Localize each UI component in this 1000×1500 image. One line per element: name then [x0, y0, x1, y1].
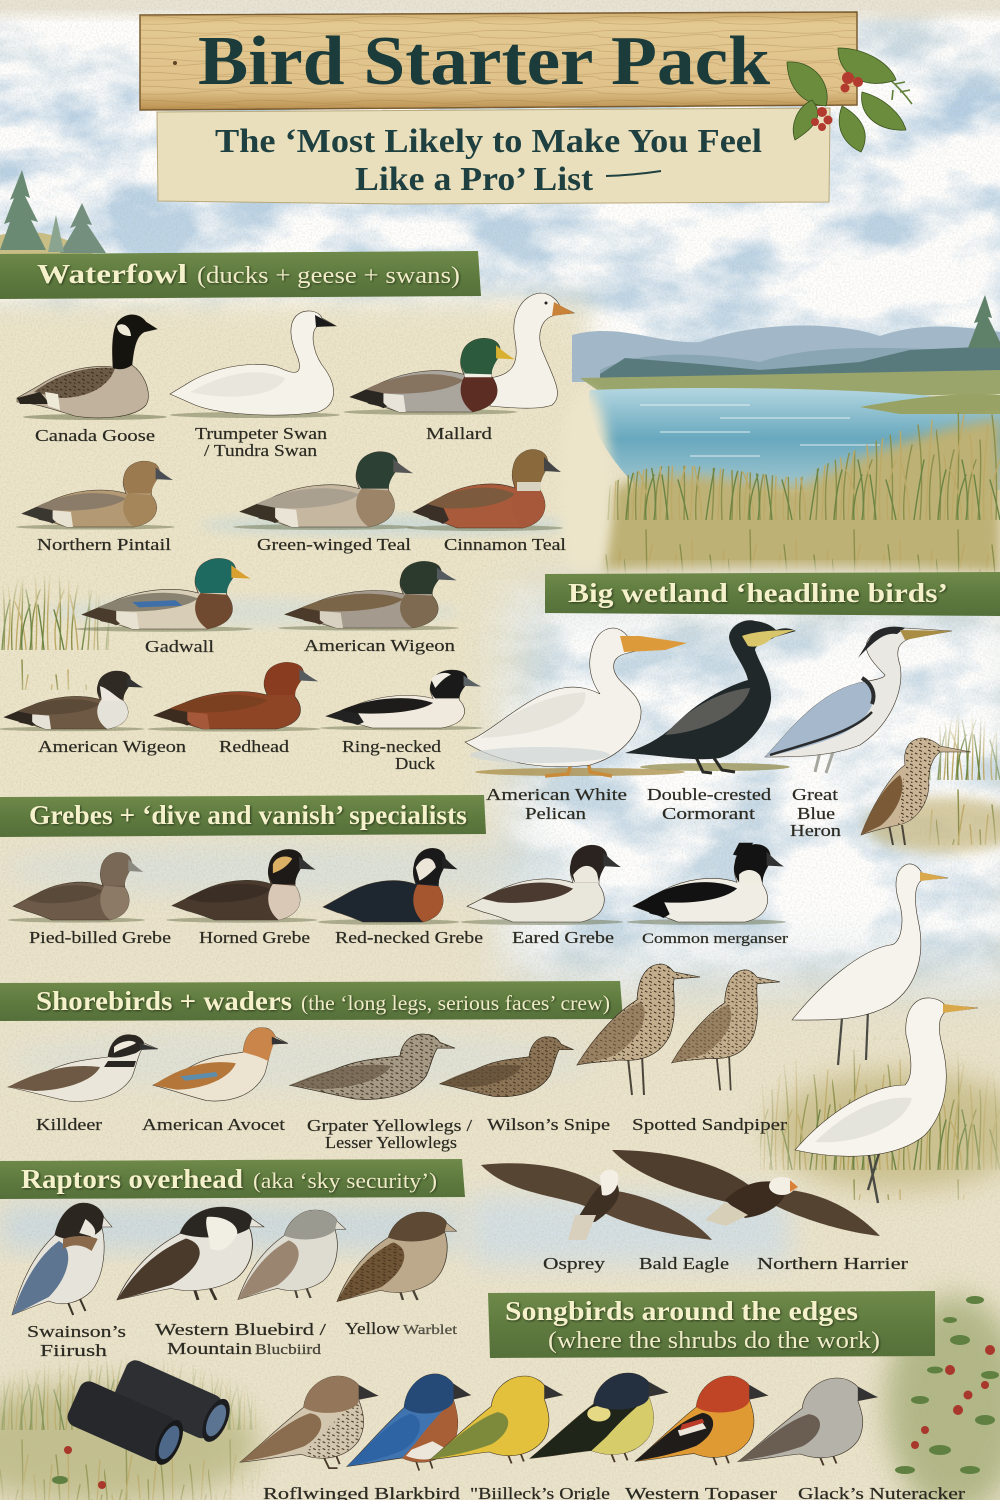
scene: left marsh grass	[0, 570, 110, 690]
labels: grebes: Pied-billed Grebe	[29, 928, 171, 947]
labels: perching birds: Fiirush	[40, 1341, 108, 1360]
banner: raptors: (aka ‘sky security’)	[253, 1168, 437, 1193]
labels: shorebirds: Lesser Yellowlegs	[325, 1133, 457, 1152]
labels: waterfowl species: American Wigeon	[304, 636, 456, 655]
banner: raptors	[0, 1159, 465, 1199]
bird: Canada Goose	[17, 315, 167, 420]
title: Bird Starter Pack	[198, 23, 770, 100]
labels: waterfowl species: American Wigeon	[38, 737, 187, 756]
banner: songbirds: Songbirds around the edges	[505, 1296, 858, 1326]
labels: big wetland species: Pelican	[525, 804, 587, 823]
banner: grebes	[0, 795, 486, 837]
bird: Cinnamon Teal	[407, 450, 563, 531]
bird: Western Bluebird	[117, 1207, 264, 1300]
bird: Green-winged Teal	[233, 452, 416, 530]
scene: shrub at bottom right	[885, 1295, 1000, 1500]
subtitle: Like a Pro’ List	[355, 161, 594, 198]
bird: Trumpeter Swan	[170, 311, 340, 418]
wooden title plank	[140, 12, 857, 110]
scene: distant lake and mountains	[520, 325, 1000, 594]
bird: American Wigeon	[278, 561, 459, 631]
labels: perching birds: Warblet	[403, 1323, 457, 1338]
bird: Swainson's Thrush	[12, 1203, 112, 1315]
labels: waterfowl species	[35, 424, 566, 773]
bird: Western Tanager	[530, 1373, 668, 1462]
bird: American Wigeon second	[0, 671, 145, 731]
bird: Wilson's Snipe	[440, 1037, 574, 1097]
bird: Snowy Egret	[795, 998, 978, 1203]
banner: grebes: Grebes + ‘dive and vanish’ specialists	[29, 800, 467, 830]
bird: American White Pelican	[465, 628, 687, 776]
labels: perching birds: Mountain	[167, 1339, 253, 1358]
labels: big wetland species	[486, 785, 842, 840]
labels: grebes	[29, 928, 788, 947]
icon: binoculars	[64, 1357, 235, 1469]
bird: Pied-billed Grebe	[8, 853, 145, 923]
scene: bottom left grass	[0, 1350, 260, 1500]
scene: right marsh grass by sandpiper	[865, 710, 1000, 853]
labels: big wetland species: Heron	[790, 821, 842, 840]
labels: waterfowl species: Redhead	[219, 737, 290, 756]
labels: raptors: Bald Eagle	[639, 1254, 729, 1273]
banner: waterfowl: (ducks + geese + swans)	[197, 263, 460, 289]
labels: waterfowl species: Green-winged Teal	[257, 535, 411, 554]
bird: Red-winged Blackbird	[240, 1376, 378, 1468]
labels: waterfowl species: Cinnamon Teal	[444, 535, 566, 554]
subtitle: The ‘Most Likely to Make You Feel	[215, 123, 762, 160]
labels: raptors	[543, 1254, 908, 1273]
labels: grebes: Eared Grebe	[512, 928, 614, 947]
bird: brown sandpiper	[861, 738, 971, 845]
bird: Eared Grebe	[461, 845, 623, 925]
labels: shorebirds	[36, 1115, 787, 1152]
scene: right pine tree	[968, 295, 1000, 348]
bird: Spotted Sandpiper	[577, 964, 700, 1095]
bird: Orange and red songbird	[635, 1376, 768, 1465]
labels: shorebirds: Wilson’s Snipe	[487, 1115, 610, 1134]
bird: Killdeer	[8, 1035, 158, 1101]
bird: Great Egret	[792, 864, 948, 1065]
labels: big wetland species: Double-crested	[647, 785, 772, 804]
banner: big wetland	[545, 572, 1000, 616]
labels: perching birds: Swainson’s	[27, 1322, 126, 1341]
bird: Common Merganser	[627, 843, 786, 925]
bird: Red-necked Grebe	[318, 848, 460, 925]
bird: Greater Yellowlegs	[290, 1034, 455, 1099]
banner: songbirds: (where the shrubs do the work)	[548, 1328, 880, 1354]
labels: waterfowl species: Duck	[395, 754, 436, 773]
bird: Bald Eagle in flight	[612, 1150, 880, 1236]
bird: swan behind mallard	[490, 293, 574, 408]
labels: waterfowl species: Northern Pintail	[37, 535, 171, 554]
labels: big wetland species: Great	[792, 785, 838, 804]
labels: perching birds: Yellow	[345, 1319, 401, 1338]
bird: Gadwall	[75, 558, 253, 632]
banner: shorebirds: Shorebirds + waders	[36, 986, 292, 1016]
bird: Yellow songbird	[430, 1376, 563, 1463]
icon: holly and berries	[787, 48, 912, 152]
banner: songbirds	[488, 1291, 935, 1358]
bird: Spotted Sandpiper second	[672, 970, 780, 1090]
bird: American Avocet	[153, 1028, 288, 1101]
bird: Ring-necked Duck	[320, 670, 484, 730]
bird: Yellow Warbler	[337, 1212, 457, 1302]
bird: Great Blue Heron	[765, 627, 952, 773]
banner: waterfowl	[0, 251, 481, 299]
subtitle	[215, 123, 762, 198]
labels: shorebirds: Spotted Sandpiper	[632, 1115, 787, 1134]
bird: Clark's Nutcracker	[738, 1378, 877, 1465]
labels: raptors: Osprey	[543, 1254, 606, 1273]
bird: Mallard	[343, 338, 517, 415]
parchment subtitle panel	[157, 108, 830, 204]
bird: Horned Grebe	[166, 849, 318, 923]
labels: songbirds	[263, 1484, 965, 1500]
bird: Osprey in flight	[481, 1163, 712, 1240]
bird: Redhead	[147, 662, 320, 732]
labels: shorebirds: Killdeer	[36, 1115, 102, 1134]
labels: grebes: Common merganser	[642, 931, 788, 947]
bird: Bullock's Oriole	[347, 1374, 470, 1471]
labels: perching birds	[27, 1319, 457, 1360]
labels: grebes: Horned Grebe	[199, 928, 310, 947]
labels: perching birds: Western Bluebird /	[155, 1320, 326, 1339]
labels: waterfowl species: Ring-necked	[342, 737, 442, 756]
scene: left pine trees	[0, 170, 106, 255]
banner: raptors: Raptors overhead	[21, 1164, 243, 1194]
banner: waterfowl: Waterfowl	[37, 259, 188, 289]
labels: waterfowl species: Gadwall	[145, 637, 214, 656]
labels: raptors: Northern Harrier	[757, 1254, 908, 1273]
labels: big wetland species: American White	[486, 785, 627, 804]
labels: big wetland species: Cormorant	[662, 804, 755, 823]
labels: perching birds: Blucbiird	[255, 1342, 322, 1358]
banner: shorebirds: (the ‘long legs, serious faces’ crew)	[301, 991, 610, 1015]
bird: Northern Pintail	[16, 461, 175, 530]
bird: Double-crested Cormorant	[625, 620, 796, 773]
labels: grebes: Red-necked Grebe	[335, 928, 483, 947]
labels: waterfowl species: / Tundra Swan	[204, 441, 318, 460]
scene: right marsh grass by egrets	[760, 1030, 1000, 1200]
labels: shorebirds: American Avocet	[142, 1115, 285, 1134]
bird: Mountain Bluebird	[238, 1210, 346, 1300]
labels: waterfowl species: Mallard	[426, 424, 493, 443]
banner: big wetland: Big wetland ‘headline birds’	[568, 578, 948, 608]
banner: shorebirds	[0, 981, 623, 1021]
labels: waterfowl species: Trumpeter Swan	[195, 424, 328, 443]
labels: shorebirds: Grpater Yellowlegs /	[307, 1116, 472, 1135]
labels: waterfowl species: Canada Goose	[35, 426, 155, 445]
labels: big wetland species: Blue	[797, 804, 835, 823]
